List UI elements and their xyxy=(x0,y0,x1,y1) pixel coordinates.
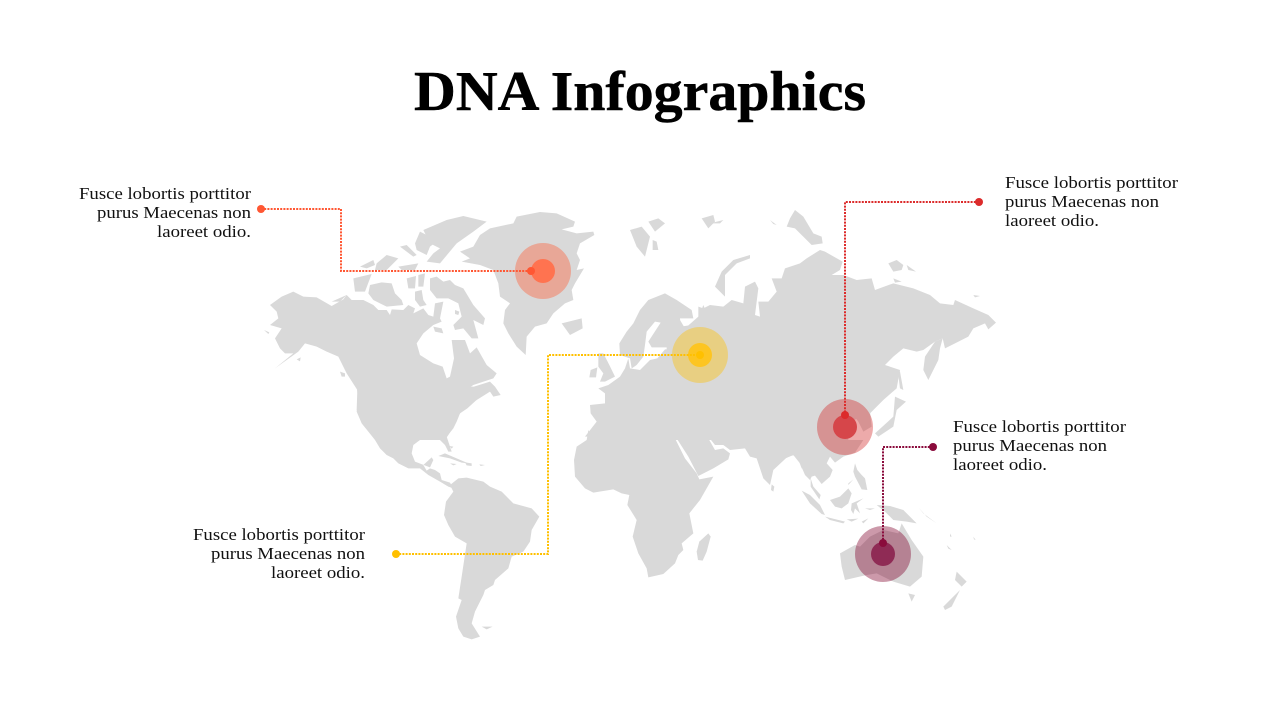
text block: bottom left xyxy=(193,525,366,582)
text block: lower right xyxy=(953,417,1126,474)
text block: bottom left: purus Maecenas non xyxy=(211,544,366,563)
map: Middle East and India xyxy=(708,390,823,492)
connector: red xyxy=(841,198,983,419)
text block: lower right: Fusce lobortis porttitor xyxy=(953,417,1126,436)
map: Africa and Arabia xyxy=(574,430,730,577)
text block: lower right: purus Maecenas non xyxy=(953,436,1108,455)
marker: purple circle on Australia xyxy=(855,526,911,582)
text block: bottom left: laoreet odio. xyxy=(271,563,365,582)
text block: top right: laoreet odio. xyxy=(1005,211,1099,230)
world map xyxy=(264,210,996,639)
connector: yellow xyxy=(392,351,704,558)
text block: top left: purus Maecenas non xyxy=(97,203,252,222)
text block: top right: purus Maecenas non xyxy=(1005,192,1160,211)
text block: lower right: laoreet odio. xyxy=(953,455,1047,474)
marker: red circle on China xyxy=(817,399,873,455)
text block: top right: Fusce lobortis porttitor xyxy=(1005,173,1178,192)
map: South America xyxy=(444,478,539,639)
text block: top left: laoreet odio. xyxy=(157,222,251,241)
title: DNA Infographics xyxy=(414,61,866,123)
text block: top right xyxy=(1005,173,1178,230)
map: Korea, Japan, Australia and Oceania xyxy=(840,390,976,610)
marker: yellow circle on Russia xyxy=(672,327,728,383)
marker: orange circle on Greenland xyxy=(515,243,571,299)
map: North America and Greenland xyxy=(264,212,594,440)
text block: bottom left: Fusce lobortis porttitor xyxy=(193,525,365,544)
connector: purple xyxy=(879,443,937,547)
connector: orange xyxy=(257,205,535,275)
map: Russia and northern Asia xyxy=(630,210,996,440)
map: Southeast Asia and Indonesia xyxy=(777,440,875,523)
map: USA and Central America xyxy=(357,380,485,488)
map: Europe xyxy=(585,293,730,437)
text block: top left: Fusce lobortis porttitor xyxy=(79,184,251,203)
text block: top left xyxy=(79,184,252,241)
